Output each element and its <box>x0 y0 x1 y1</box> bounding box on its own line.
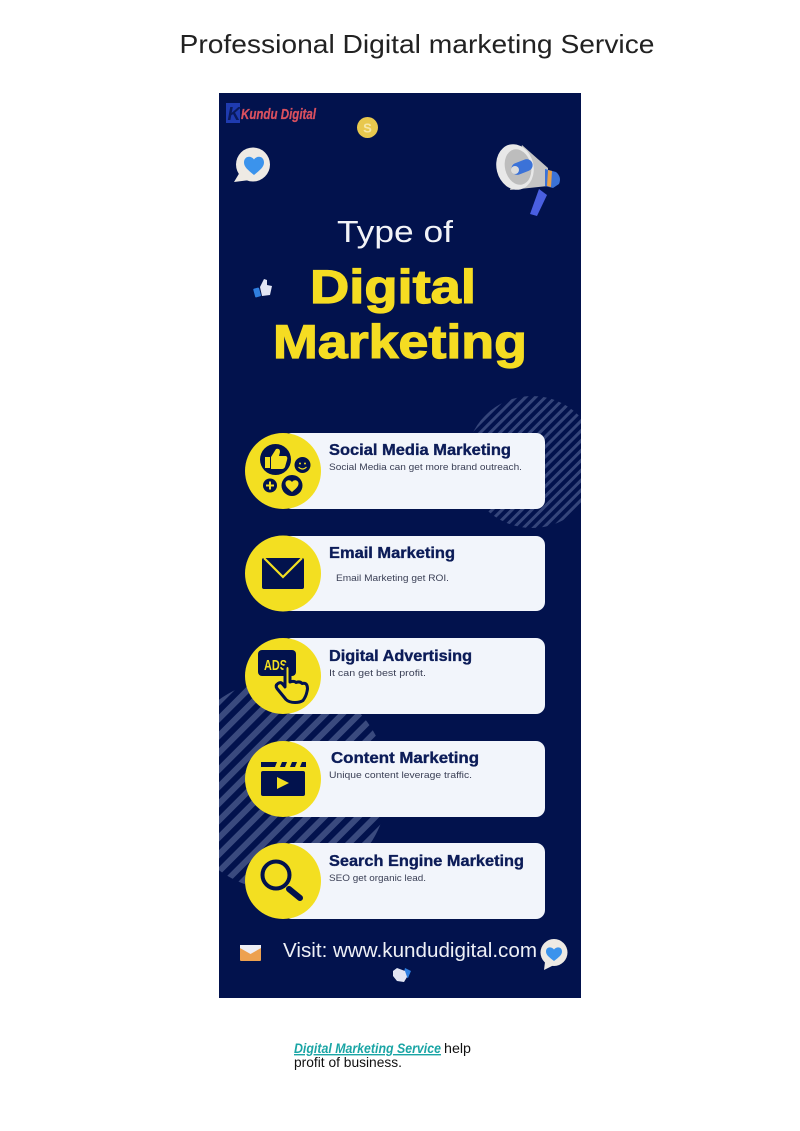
icon: envelope <box>262 558 304 589</box>
logo: Kundu Digital <box>226 103 317 124</box>
icon: thumbs up <box>253 279 272 298</box>
card title: Digital Advertising <box>329 648 472 665</box>
card: Search Engine Marketing <box>245 843 545 919</box>
card text: SEO get organic lead. <box>329 873 426 884</box>
card text: Social Media can get more brand outreach. <box>329 462 522 473</box>
icon: video clapper <box>261 762 306 796</box>
card: Digital Advertising <box>245 638 545 714</box>
heading: Marketing: Marketing <box>273 315 527 368</box>
caption <box>294 1040 471 1070</box>
icon: magnifier <box>262 862 300 898</box>
heading: Type of: Type of <box>337 214 453 249</box>
card text: Unique content leverage traffic. <box>329 770 472 781</box>
icon: social media <box>260 444 310 496</box>
logo: Kundu Digital: Kundu Digital <box>241 106 317 123</box>
icon: thumb small <box>393 968 411 982</box>
card text: Email Marketing get ROI. <box>336 573 449 584</box>
card: Content Marketing <box>245 741 545 817</box>
card: Email Marketing <box>245 536 545 612</box>
icon: coin: S <box>363 120 372 136</box>
icon: coin <box>357 117 378 138</box>
striped circle top right <box>474 396 581 528</box>
icon: heart bubble small <box>540 939 568 970</box>
card title: Content Marketing <box>331 750 479 767</box>
card title: Email Marketing <box>329 545 455 562</box>
card title: Social Media Marketing <box>329 442 511 459</box>
striped circle bottom left <box>219 687 380 884</box>
card title: Search Engine Marketing <box>329 853 524 870</box>
icon: ads click: ADS <box>264 657 287 674</box>
icon: megaphone <box>491 140 560 216</box>
icon: orange envelope <box>240 945 261 961</box>
card text: It can get best profit. <box>329 668 426 679</box>
caption text line 1: help <box>444 1040 471 1056</box>
caption link: Digital Marketing Service <box>294 1040 441 1056</box>
panel: infographic poster <box>219 93 581 998</box>
logo: Kundu Digital: K <box>228 104 242 124</box>
page title: Professional Digital marketing Service <box>180 29 654 59</box>
heading: Digital: Digital <box>310 260 476 313</box>
caption text line 2: profit of business. <box>294 1054 402 1070</box>
icon: ads click <box>258 650 308 702</box>
card: Social Media Marketing <box>245 433 545 509</box>
icon: heart speech bubble <box>234 148 270 182</box>
website text: Visit: www.kundudigital.com <box>283 940 537 962</box>
